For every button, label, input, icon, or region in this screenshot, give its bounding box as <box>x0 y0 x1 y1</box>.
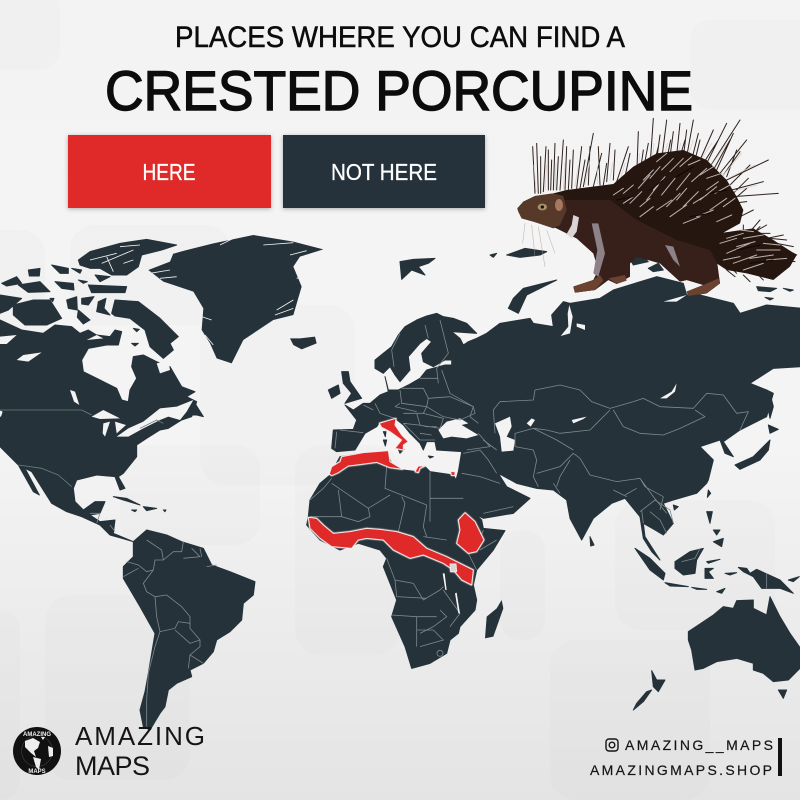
red range areas: here <box>308 418 484 585</box>
Eurasia <box>328 248 800 560</box>
icon: instagram <box>606 739 618 751</box>
North America <box>0 320 203 542</box>
range: Italy <box>379 418 408 450</box>
Southeast Asia and Oceania <box>553 483 800 710</box>
legend: not here <box>283 135 485 208</box>
quill highlights on body <box>613 153 787 270</box>
social handle: AMAZING__MAPS <box>625 737 773 753</box>
grey flank stripe <box>592 223 680 277</box>
range: Sahel belt <box>308 517 473 585</box>
brand logo: globe badge: AMAZING <box>23 732 51 738</box>
range: Libya coast <box>415 466 425 473</box>
Europe borders <box>335 320 497 450</box>
brand name: MAPS <box>75 751 150 781</box>
body <box>517 150 797 296</box>
world map <box>0 235 800 730</box>
crested porcupine illustration <box>517 118 797 296</box>
whiskers <box>523 223 555 267</box>
brand logo: globe badge <box>13 727 61 775</box>
legend: not here: NOT HERE <box>331 159 437 185</box>
range: Ethiopia <box>457 513 484 553</box>
legend: here: HERE <box>142 159 196 185</box>
Lake Victoria <box>450 564 457 572</box>
white neck collar <box>567 215 579 238</box>
Madagascar <box>485 600 503 638</box>
Canadian Arctic islands <box>0 239 178 358</box>
range: North Africa coast <box>329 451 403 476</box>
Africa <box>307 452 505 668</box>
quills behind body <box>533 118 797 282</box>
ear and eye <box>555 199 563 211</box>
Mediterranean islands <box>383 432 433 458</box>
legend: here <box>68 135 271 208</box>
body fur lighter <box>557 200 720 296</box>
South America <box>90 513 255 730</box>
feet <box>573 275 720 296</box>
website: AMAZINGMAPS.SHOP <box>590 762 772 778</box>
Greenland and Iceland <box>148 235 323 363</box>
title line two: CRESTED PORCUPINE <box>105 59 693 122</box>
range: Sinai <box>451 472 455 475</box>
UK and Ireland <box>328 372 362 403</box>
brand logo: globe badge: MAPS <box>28 769 46 775</box>
Japan and Sakhalin <box>735 393 778 469</box>
head <box>517 193 567 228</box>
brand name: AMAZING <box>75 721 205 751</box>
footer bar <box>778 738 782 776</box>
title line one: PLACES WHERE YOU CAN FIND A <box>175 21 625 54</box>
brand name <box>75 721 205 781</box>
